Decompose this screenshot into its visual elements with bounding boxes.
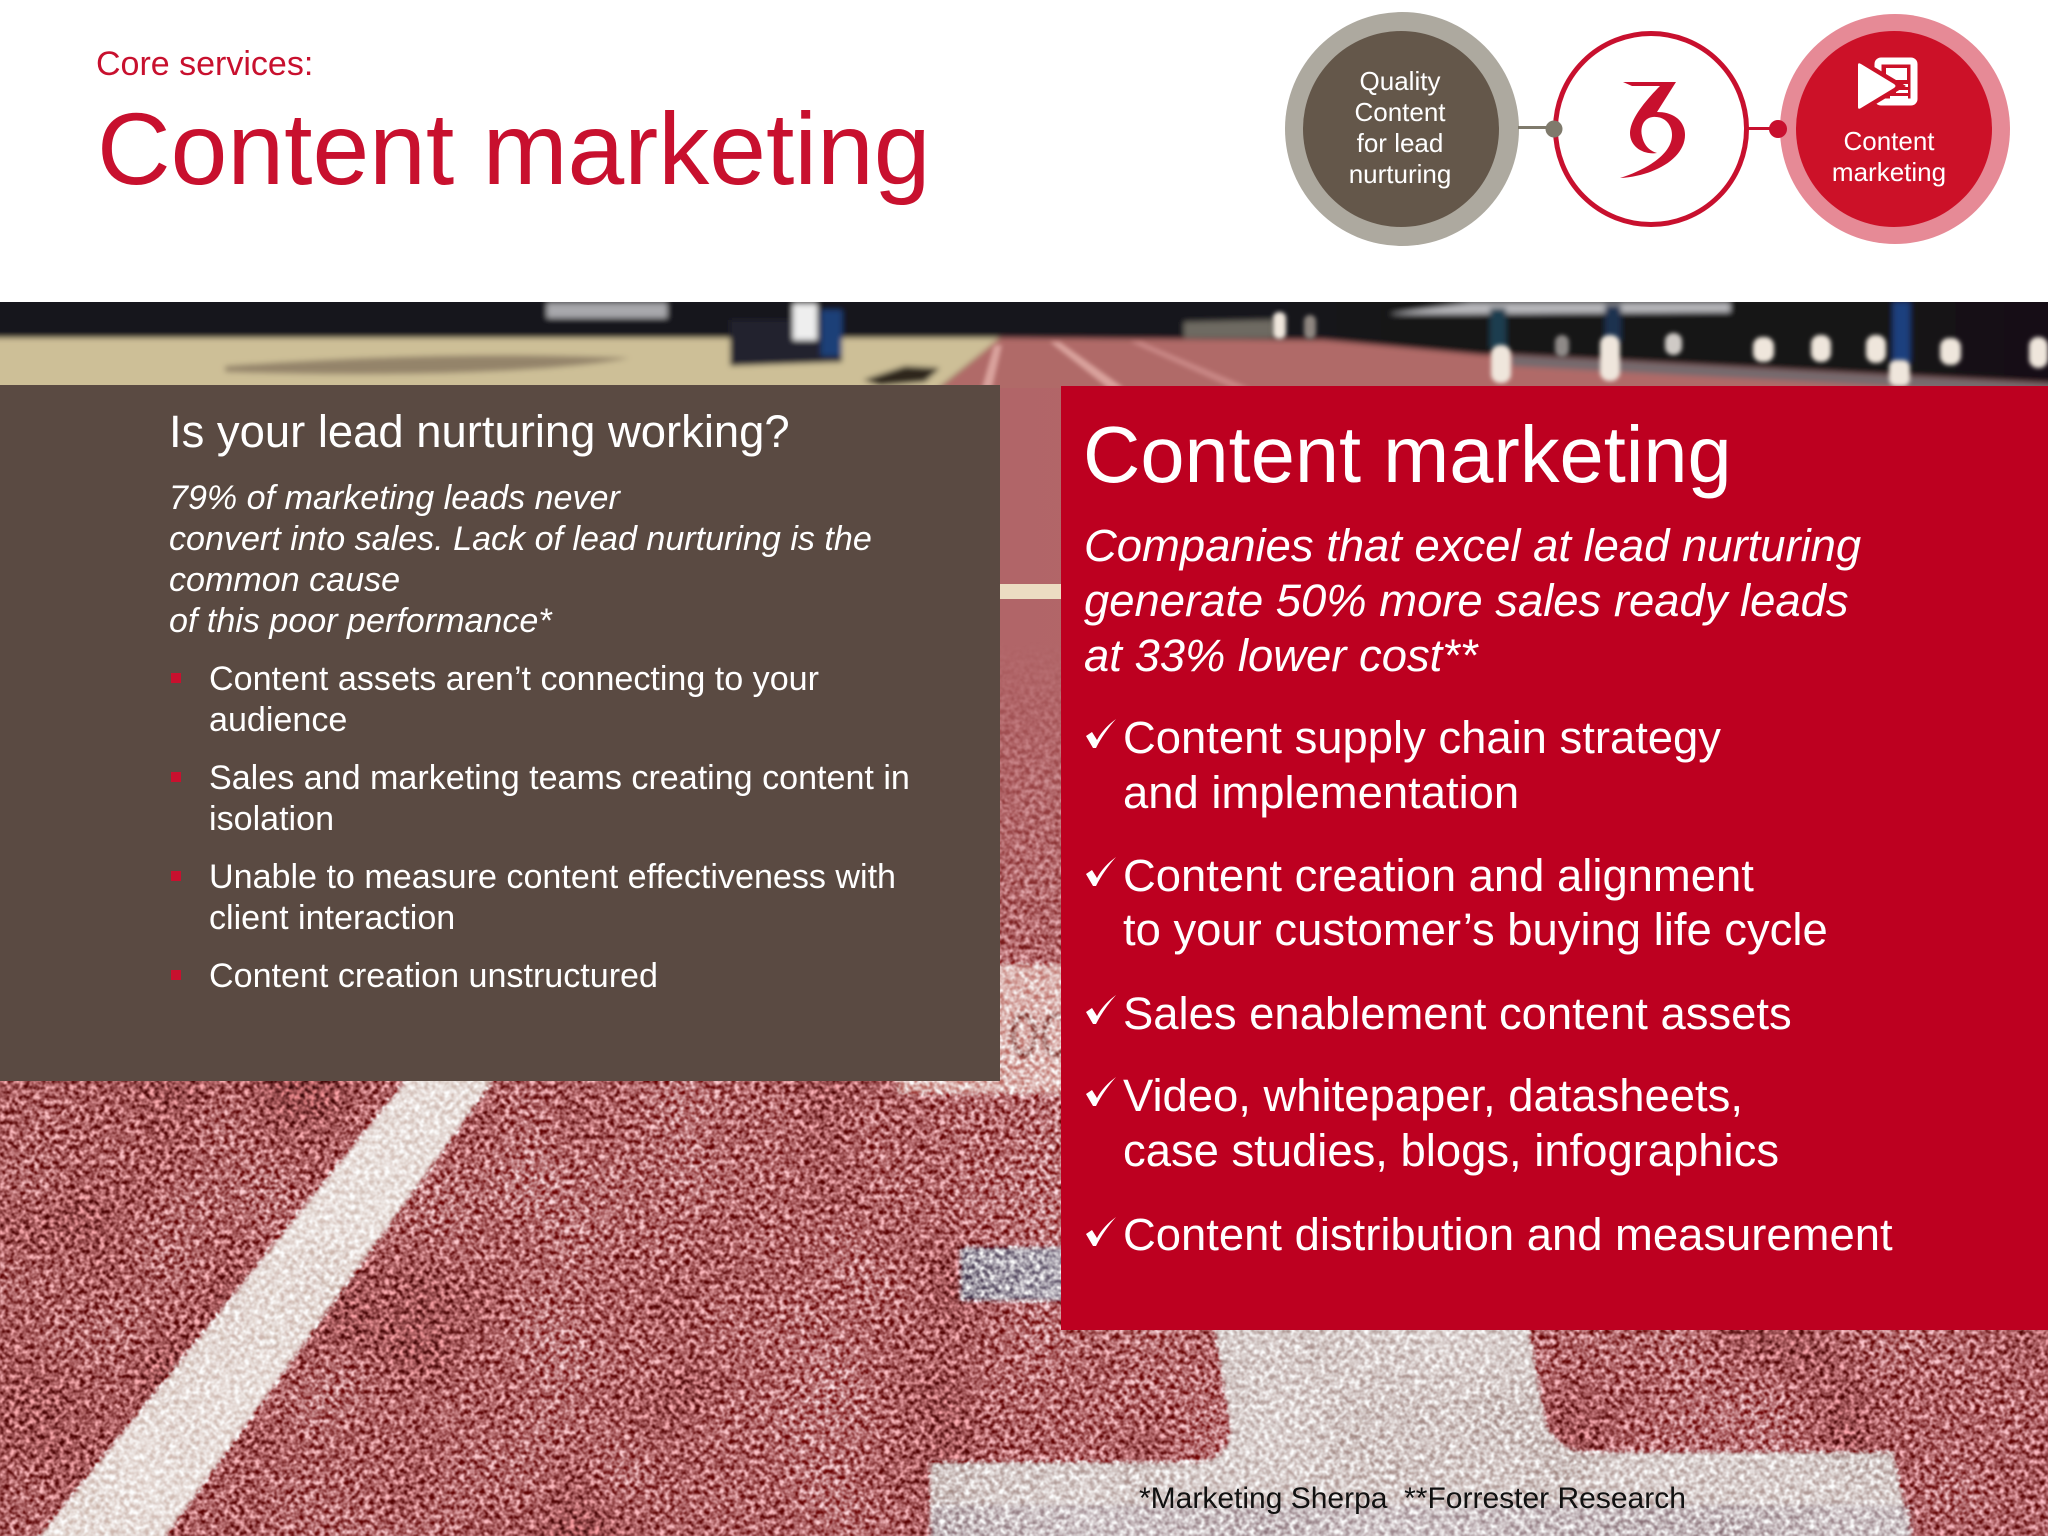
cross marking <box>930 1325 1912 1536</box>
item 4 <box>1086 1070 1779 1176</box>
panel heading: Is your lead nurturing working? <box>169 406 790 457</box>
sand infield <box>0 338 1000 395</box>
bullet 2: Sales and marketing teams creating content in <box>209 759 910 797</box>
circle: content marketing <box>1780 14 2010 244</box>
bullet list <box>171 660 910 995</box>
speckle grain <box>0 640 2048 1536</box>
intro italic text: 79% of marketing leads never <box>169 479 621 517</box>
logo circle <box>1556 34 1746 224</box>
panel heading: Content marketing <box>1083 410 1732 499</box>
navigation circles <box>1285 12 2010 246</box>
item 1: Content supply chain strategy <box>1123 712 1721 763</box>
checklist <box>1086 712 1893 1260</box>
item 2 <box>1086 850 1828 955</box>
intro italic text <box>169 479 872 640</box>
bullet 1: audience <box>209 701 347 739</box>
panel: content marketing <box>1061 386 2048 1330</box>
intro italic text: convert into sales. Lack of lead nurturing is the <box>169 520 872 558</box>
icon: play and document <box>1856 56 1914 116</box>
italic statement <box>1084 520 1861 681</box>
item 1 <box>1086 712 1721 818</box>
far track <box>930 338 2048 396</box>
intro italic text: of this poor performance* <box>169 602 553 640</box>
circle: quality content: Content <box>1354 97 1446 127</box>
item 4: Video, whitepaper, datasheets, <box>1123 1070 1743 1121</box>
item 5: Content distribution and measurement <box>1123 1209 1893 1260</box>
circle: quality content: Quality <box>1360 66 1440 96</box>
title: Content marketing <box>97 92 930 206</box>
circle: quality content <box>1285 12 1519 246</box>
bullet 2 <box>171 759 910 838</box>
logo mark <box>1620 82 1685 178</box>
italic statement: at 33% lower cost** <box>1084 630 1479 681</box>
item 4: case studies, blogs, infographics <box>1123 1125 1779 1176</box>
circle: quality content: for lead <box>1357 128 1443 158</box>
bullet 3: Unable to measure content effectiveness with <box>209 858 896 896</box>
item 2: to your customer’s buying life cycle <box>1123 904 1828 955</box>
italic statement: generate 50% more sales ready leads <box>1084 575 1849 626</box>
panel: lead nurturing <box>0 385 1000 1081</box>
bullet 3 <box>171 858 896 937</box>
intro italic text: common cause <box>169 561 400 599</box>
item 3: Sales enablement content assets <box>1123 988 1792 1039</box>
circle: content marketing: marketing <box>1832 157 1946 187</box>
bullet 2: isolation <box>209 800 334 838</box>
gray patch <box>960 1247 1070 1301</box>
bullet 1 <box>171 660 819 739</box>
darker blotches <box>0 1050 2048 1536</box>
photo lower track <box>0 745 2048 1536</box>
bullet 4: Content creation unstructured <box>209 957 658 995</box>
lane line <box>36 1075 497 1536</box>
item 2: Content creation and alignment <box>1123 850 1754 901</box>
pale tile <box>898 964 1070 1094</box>
italic statement: Companies that excel at lead nurturing <box>1084 520 1861 571</box>
circle: quality content: nurturing <box>1349 159 1451 189</box>
breadcrumb: Core services: Core services: <box>96 45 313 83</box>
bullet 1: Content assets aren’t connecting to your <box>209 660 819 698</box>
connector right <box>1748 120 1787 138</box>
connector left <box>1518 120 1562 138</box>
item 1: and implementation <box>1123 767 1519 818</box>
bullet 3: client interaction <box>209 899 455 937</box>
circle: content marketing: Content <box>1843 126 1935 156</box>
footnote: sources: *Marketing Sherpa **Forrester Research <box>1139 1482 1686 1515</box>
